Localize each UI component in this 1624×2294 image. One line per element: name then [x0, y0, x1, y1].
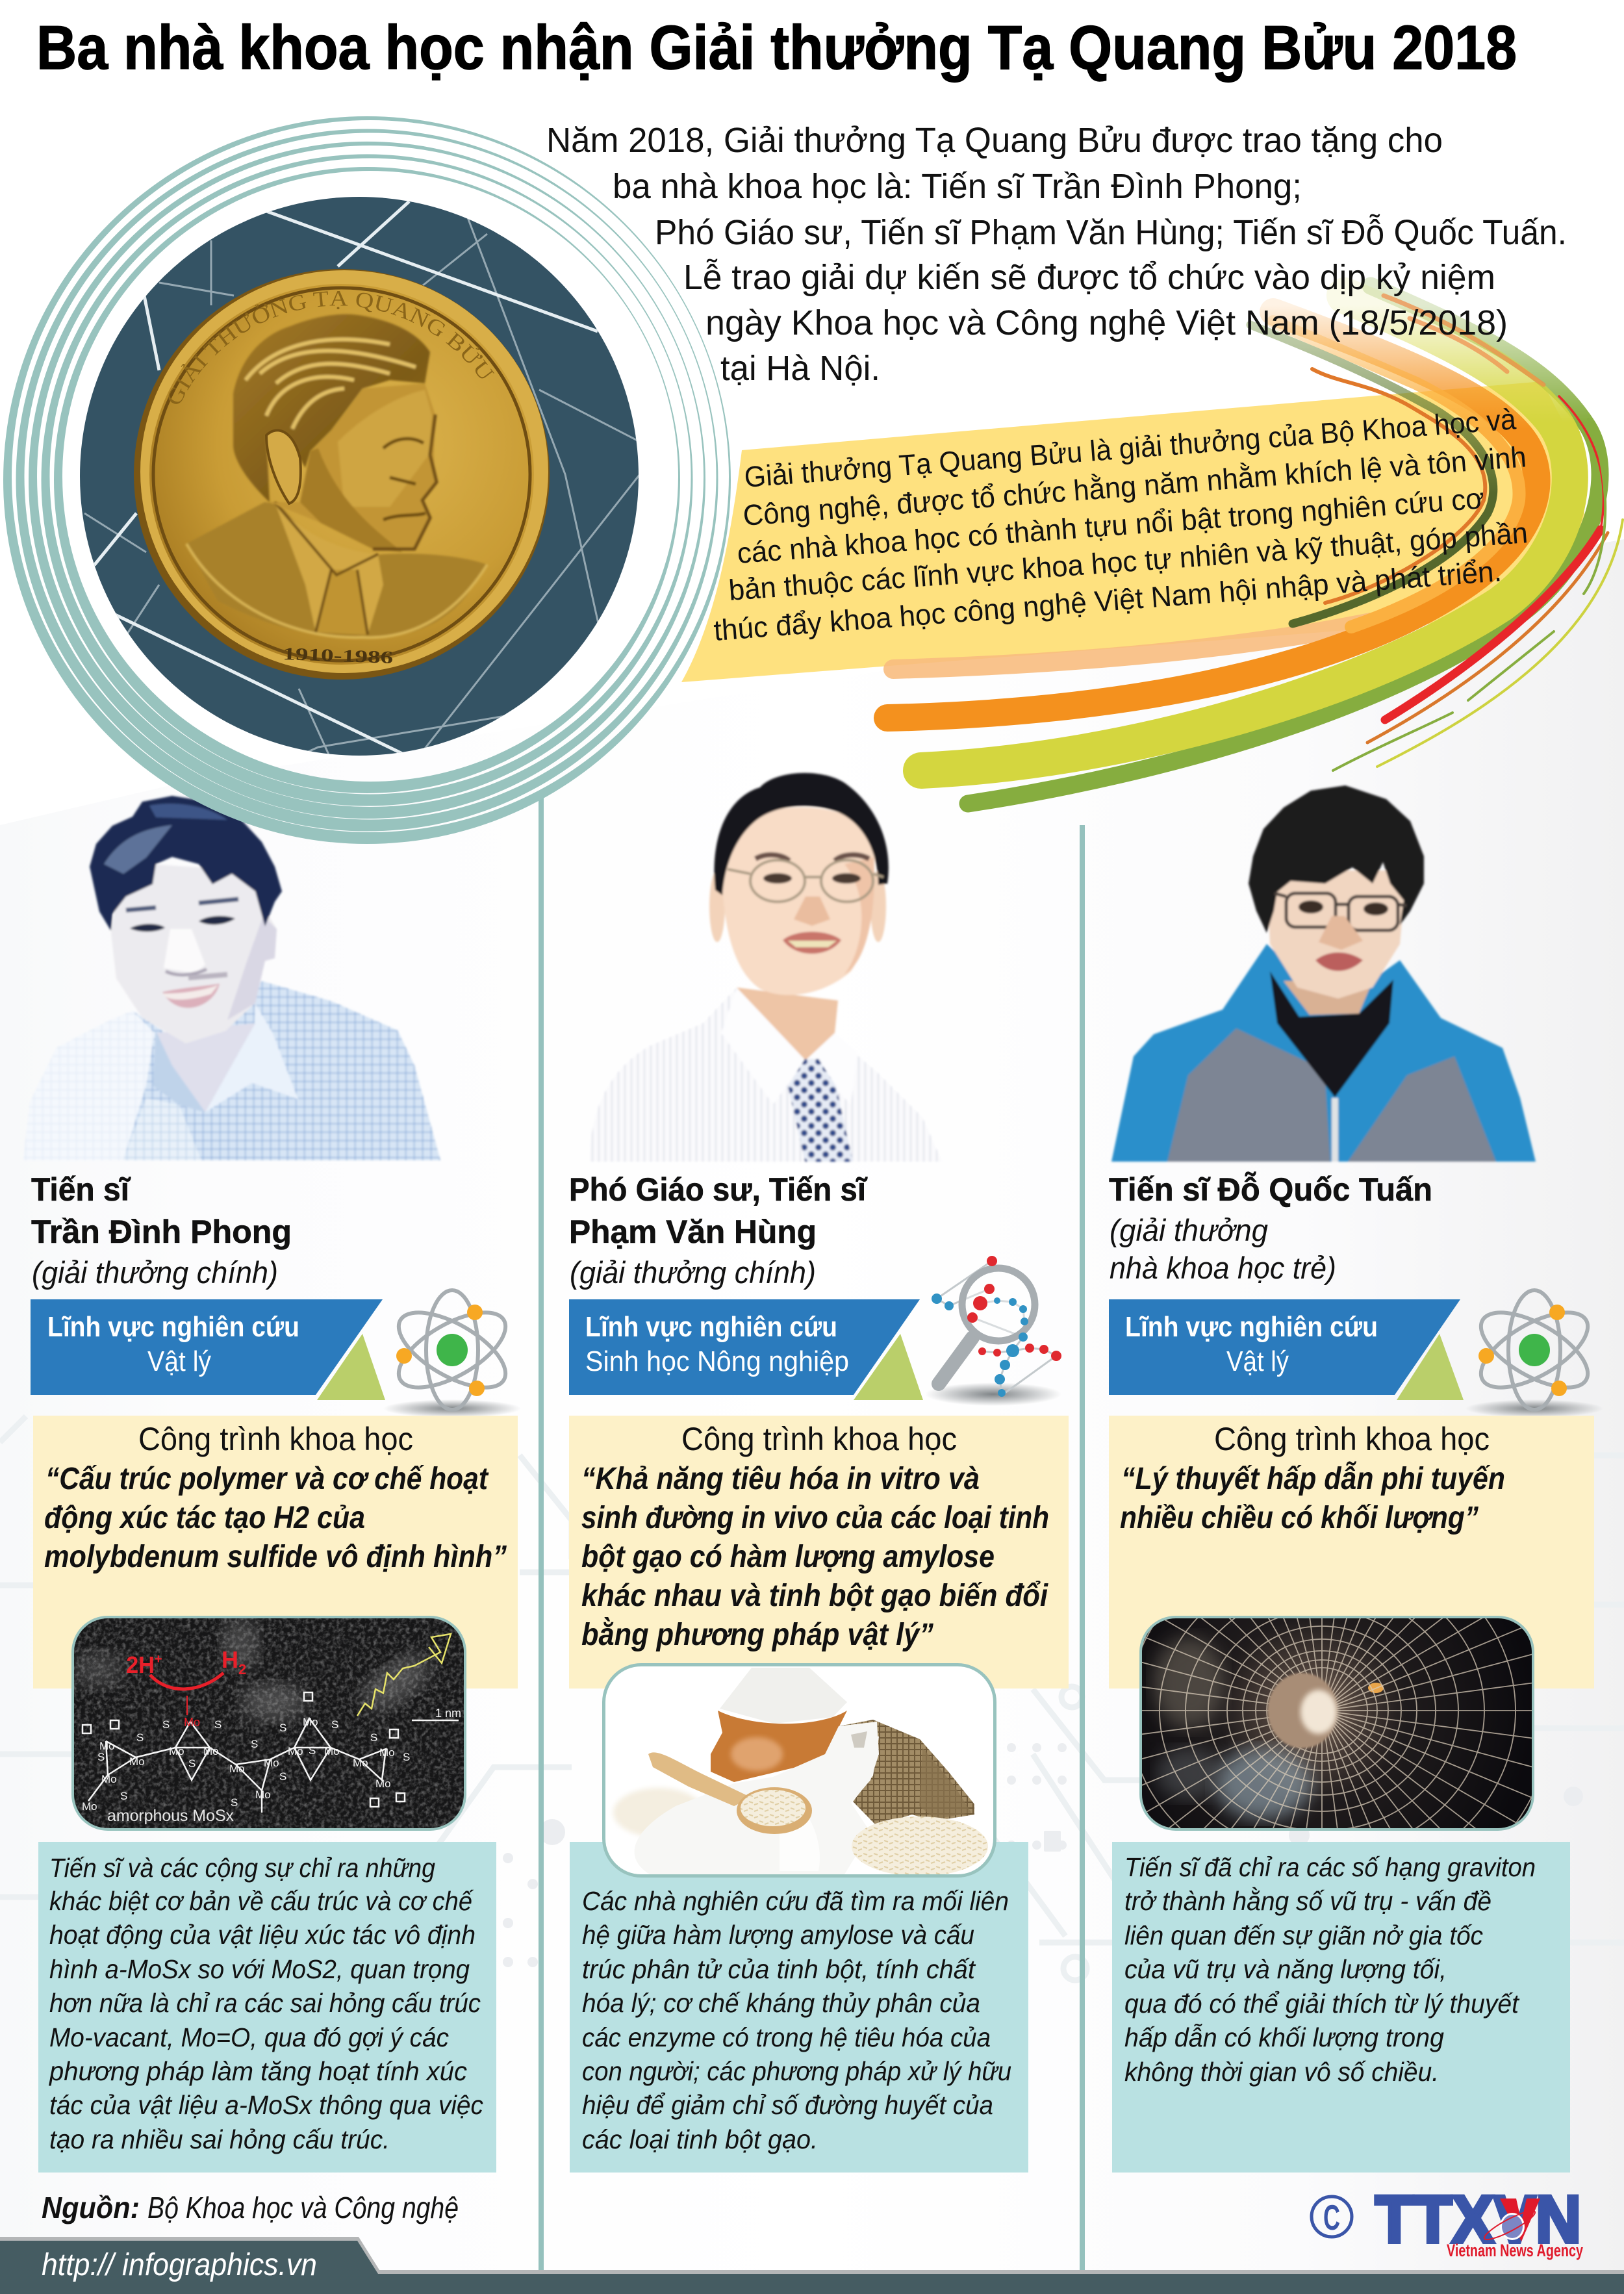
image: amorphous MoSx micrograph: Mo: [203, 1745, 219, 1757]
column 3 description box: Tiến sĩ đã chỉ ra các số hạng graviton: [1124, 1852, 1536, 1882]
image: amorphous MoSx micrograph: S: [162, 1718, 170, 1731]
column 3 description box: không thời gian vô số chiều.: [1124, 2057, 1439, 2087]
gold medal: 1910-1986: [283, 644, 394, 667]
image: rice and flour: [602, 1663, 996, 1878]
background circuit pattern: [0, 1416, 1624, 1980]
note text on yellow band: thúc đẩy khoa học công nghệ Việt Nam hội nhập và phát triển.: [713, 554, 1503, 647]
column 2 header: scientist name: (giải thưởng chính): [570, 1255, 816, 1290]
column 2 research title box: bằng phương pháp vật lý”: [581, 1616, 933, 1652]
medal relief: face: [270, 383, 437, 552]
column 2 description box: Các nhà nghiên cứu đã tìm ra mối liên: [582, 1886, 1009, 1916]
image: amorphous MoSx micrograph: Mo: [101, 1773, 117, 1785]
column 2 field banner: Sinh học Nông nghiệp: [585, 1345, 849, 1377]
column 1 field banner: [31, 1299, 385, 1400]
intro text: tại Hà Nội.: [720, 349, 880, 388]
column 3 header: scientist name: nhà khoa học trẻ): [1110, 1251, 1336, 1285]
note text on yellow band: các nhà khoa học có thành tựu nổi bật trong nghiên cứu cơ: [736, 481, 1486, 570]
column 1 description box: Tiến sĩ và các cộng sự chỉ ra những: [49, 1853, 435, 1883]
logo: TTXVN Vietnam News Agency: TTXVN: [1375, 2182, 1581, 2256]
column 2 description box: hóa lý; cơ chế kháng thủy phân của: [582, 1988, 980, 2018]
intro text: [546, 121, 1567, 388]
image: amorphous MoSx micrograph: S: [279, 1722, 286, 1734]
swoosh band: pale peach: [893, 622, 1371, 669]
column 2 research title box: khác nhau và tinh bột gạo biến đổi: [581, 1579, 1049, 1613]
note text on yellow band: bản thuộc các lĩnh vực khoa học tự nhiên và kỹ thuật, góp phần: [728, 516, 1529, 607]
image: amorphous MoSx micrograph: H: [222, 1646, 238, 1673]
image: amorphous MoSx micrograph: S: [97, 1751, 105, 1763]
icon: DNA with magnifier: [925, 1256, 1061, 1406]
swoosh band: green outer: [968, 286, 1600, 804]
column 1 field banner: Lĩnh vực nghiên cứu: [47, 1311, 299, 1343]
image: amorphous MoSx micrograph: S: [188, 1757, 196, 1770]
image: amorphous MoSx micrograph: S: [403, 1751, 410, 1763]
column 1 description box: [38, 1842, 496, 2173]
icon: atom column 1: [383, 1290, 521, 1418]
portrait: Đỗ Quốc Tuấn: [1111, 785, 1536, 1162]
image: amorphous MoSx micrograph: S: [370, 1731, 377, 1744]
image: amorphous MoSx micrograph: [71, 1616, 466, 1831]
swoosh band: yellow-green: [921, 296, 1570, 771]
image: amorphous MoSx micrograph: 2H: [126, 1651, 155, 1678]
column 1 header: scientist name: Trần Đình Phong: [31, 1214, 292, 1250]
column 2 description box: [570, 1842, 1028, 2173]
image: amorphous MoSx micrograph: Mo: [82, 1800, 97, 1813]
medal disc background: [80, 197, 640, 773]
column 1 field banner: Vật lý: [147, 1345, 211, 1377]
column 1 description box: tác của vật liệu a-MoSx thông qua việc: [49, 2090, 483, 2120]
column 1 header: scientist name: Tiến sĩ: [31, 1171, 131, 1208]
background circuit dots: [326, 1743, 1583, 1967]
intro text: ngày Khoa học và Công nghệ Việt Nam (18/5/2018): [705, 303, 1508, 342]
column 1 header: scientist name: [31, 1171, 292, 1290]
image: amorphous MoSx micrograph: 1 nm: [435, 1707, 461, 1720]
image: amorphous MoSx micrograph: S: [120, 1790, 127, 1802]
image: amorphous MoSx micrograph: S: [279, 1770, 286, 1783]
column 1 research title box: [33, 1416, 518, 1689]
column 2 header: scientist name: Phó Giáo sư, Tiến sĩ: [569, 1171, 868, 1208]
image: amorphous MoSx micrograph: Mo: [288, 1745, 303, 1757]
column divider lines: [539, 791, 1085, 2274]
column 3 description box: [1112, 1842, 1570, 2173]
image: amorphous MoSx micrograph: 2: [238, 1661, 246, 1677]
column 3 field banner: Lĩnh vực nghiên cứu: [1125, 1311, 1378, 1343]
bottom bar: [0, 2237, 1624, 2294]
yellow note background: [681, 381, 1586, 682]
swoosh band: thin green: [1333, 419, 1605, 771]
image: amorphous MoSx micrograph: S: [309, 1744, 316, 1757]
column 2 description box: hiệu để giảm chỉ số đường huyết của: [582, 2090, 993, 2120]
swoosh band: orange: [887, 312, 1537, 718]
rainbow swoosh: [887, 286, 1623, 804]
column 1 header: scientist name: (giải thưởng chính): [32, 1255, 278, 1290]
image: amorphous MoSx micrograph: S: [331, 1718, 338, 1731]
image: amorphous MoSx micrograph: Mo: [129, 1755, 145, 1768]
image: amorphous MoSx micrograph: amorphous MoSx: [107, 1807, 234, 1825]
column 2 field banner: [569, 1299, 923, 1400]
swoosh band: light orange: [1273, 322, 1519, 627]
column 2 research title box: “Khả năng tiêu hóa in vitro và: [581, 1462, 980, 1496]
swoosh band: thin orange: [1367, 533, 1608, 743]
intro text: Phó Giáo sư, Tiến sĩ Phạm Văn Hùng; Tiến sĩ Đỗ Quốc Tuấn.: [655, 213, 1567, 252]
source credit: [42, 2191, 459, 2224]
image: amorphous MoSx micrograph: Mo: [379, 1746, 395, 1759]
column 2 description box: hệ giữa hàm lượng amylose và cấu: [582, 1920, 974, 1950]
column 2 research title box: Công trình khoa học: [681, 1421, 957, 1457]
image: amorphous MoSx micrograph: Mo: [303, 1716, 318, 1728]
image: amorphous MoSx micrograph: S: [214, 1718, 222, 1731]
portrait: Phạm Văn Hùng: [590, 773, 942, 1162]
image: spacetime tunnel: [1139, 1616, 1534, 1831]
column 2 research title box: sinh đường in vivo của các loại tinh: [581, 1501, 1049, 1535]
column 2 description box: các loại tinh bột gạo.: [582, 2124, 818, 2154]
column 1 description box: Mo-vacant, Mo=O, qua đó gợi ý các: [49, 2022, 449, 2052]
image: amorphous MoSx micrograph: Mo: [375, 1778, 391, 1790]
column 3 research title box: [1109, 1416, 1594, 1689]
image: amorphous MoSx micrograph: Mo: [99, 1740, 115, 1752]
column 1 research title box: “Cấu trúc polymer và cơ chế hoạt: [45, 1462, 489, 1496]
column 1 description box: khác biệt cơ bản về cấu trúc và cơ chế: [49, 1886, 474, 1916]
image: amorphous MoSx micrograph: S: [231, 1796, 238, 1809]
source credit: Bộ Khoa học và Công nghệ: [147, 2191, 459, 2224]
column 3 research title box: Công trình khoa học: [1214, 1421, 1490, 1457]
column 1 description box: hình a-MoSx so với MoS2, quan trọng: [49, 1954, 470, 1984]
column 1 description box: hơn nữa là chỉ ra các sai hỏng cấu trúc: [49, 1988, 481, 2018]
column 3 research title box: nhiều chiều có khối lượng”: [1120, 1501, 1478, 1535]
column 2 header: scientist name: Phạm Văn Hùng: [569, 1214, 817, 1250]
column 1 description box: tạo ra nhiều sai hỏng cấu trúc.: [49, 2124, 390, 2154]
medal relief: jacket: [186, 502, 487, 637]
image: amorphous MoSx micrograph: Mo: [184, 1716, 200, 1729]
icon: atom column 3: [1465, 1290, 1603, 1418]
column 3 description box: trở thành hằng số vũ trụ - vấn đề: [1124, 1886, 1491, 1916]
column 3 header: scientist name: Tiến sĩ Đỗ Quốc Tuấn: [1109, 1171, 1432, 1208]
column 3 description box: hấp dẫn có khối lượng trong: [1124, 2022, 1444, 2052]
image: amorphous MoSx micrograph: +: [155, 1652, 162, 1666]
column 1 research title box: động xúc tác tạo H2 của: [44, 1501, 365, 1535]
column 2 research title box: [569, 1416, 1069, 1689]
column 3 header: scientist name: [1109, 1171, 1432, 1285]
column 1 research title box: molybdenum sulfide vô định hình”: [44, 1540, 507, 1574]
medal rings: [3, 116, 731, 844]
image: amorphous MoSx micrograph: Mo: [255, 1789, 271, 1801]
gold medal: [134, 269, 550, 680]
note text on yellow band: Giải thưởng Tạ Quang Bửu là giải thưởng của Bộ Khoa học và: [743, 402, 1517, 494]
column 2 header: scientist name: [569, 1171, 868, 1290]
column 2 field banner: Lĩnh vực nghiên cứu: [585, 1311, 837, 1343]
image: amorphous MoSx micrograph: Mo: [324, 1745, 340, 1757]
intro text: ba nhà khoa học là: Tiến sĩ Trần Đình Phong;: [613, 167, 1302, 206]
portrait: Trần Đình Phong: [23, 796, 440, 1160]
column 3 research title box: “Lý thuyết hấp dẫn phi tuyến: [1121, 1461, 1505, 1496]
intro text: Năm 2018, Giải thưởng Tạ Quang Bửu được trao tặng cho: [546, 121, 1443, 160]
column 2 research title box: bột gạo có hàm lượng amylose: [581, 1540, 995, 1574]
column 3 description box: liên quan đến sự giãn nở gia tốc: [1124, 1920, 1483, 1950]
intro text: Lễ trao giải dự kiến sẽ được tổ chức vào dịp kỷ niệm: [683, 258, 1495, 297]
column 3 description box: qua đó có thể giải thích từ lý thuyết: [1124, 1989, 1520, 2019]
swoosh band: red: [1385, 529, 1601, 720]
image: amorphous MoSx micrograph: Mo: [264, 1757, 279, 1769]
swoosh band: dark green: [1250, 325, 1493, 624]
swoosh band: thin yellow-green: [1377, 520, 1623, 767]
column 3 field banner: [1109, 1299, 1464, 1400]
column 1 description box: hoạt động của vật liệu xúc tác vô định: [49, 1920, 476, 1950]
image: amorphous MoSx micrograph: Mo: [353, 1757, 368, 1769]
medal relief: hair: [233, 314, 430, 502]
source credit: Nguồn:: [42, 2191, 140, 2224]
gold medal: GIẢI THƯỞNG TẠ QUANG BỬU: [169, 291, 494, 404]
copyright symbol: [1312, 2197, 1352, 2237]
column 2 description box: các enzyme có trong hệ tiêu hóa của: [582, 2022, 991, 2052]
column 3 field banner: Vật lý: [1226, 1345, 1289, 1377]
note text on yellow band: [713, 402, 1529, 647]
column 1 description box: phương pháp làm tăng hoạt tính xúc: [48, 2056, 467, 2086]
image: amorphous MoSx micrograph: S: [136, 1731, 144, 1744]
website url: http:// infographics.vn: [42, 2248, 317, 2282]
column 3 header: scientist name: (giải thưởng: [1110, 1213, 1268, 1247]
copyright symbol: C: [1323, 2197, 1340, 2237]
swoosh band: red taper: [1559, 396, 1603, 529]
column 2 description box: con người; các phương pháp xử lý hữu: [582, 2056, 1011, 2086]
column 2 description box: trúc phân tử của tinh bột, tính chất: [582, 1954, 976, 1984]
image: amorphous MoSx micrograph: Mo: [229, 1763, 245, 1775]
column 3 description box: của vũ trụ và năng lượng tối,: [1124, 1954, 1447, 1984]
medal relief: ear: [266, 430, 301, 503]
note text on yellow band: Công nghệ, được tổ chức hằng năm nhằm khích lệ và tôn vinh: [742, 440, 1527, 532]
swoosh band: thin orange inner: [1312, 369, 1485, 603]
image: amorphous MoSx micrograph: S: [251, 1738, 258, 1750]
image: amorphous MoSx micrograph: Mo: [169, 1745, 184, 1757]
swoosh band: top peach: [1384, 296, 1543, 385]
column 1 research title box: Công trình khoa học: [138, 1421, 413, 1457]
